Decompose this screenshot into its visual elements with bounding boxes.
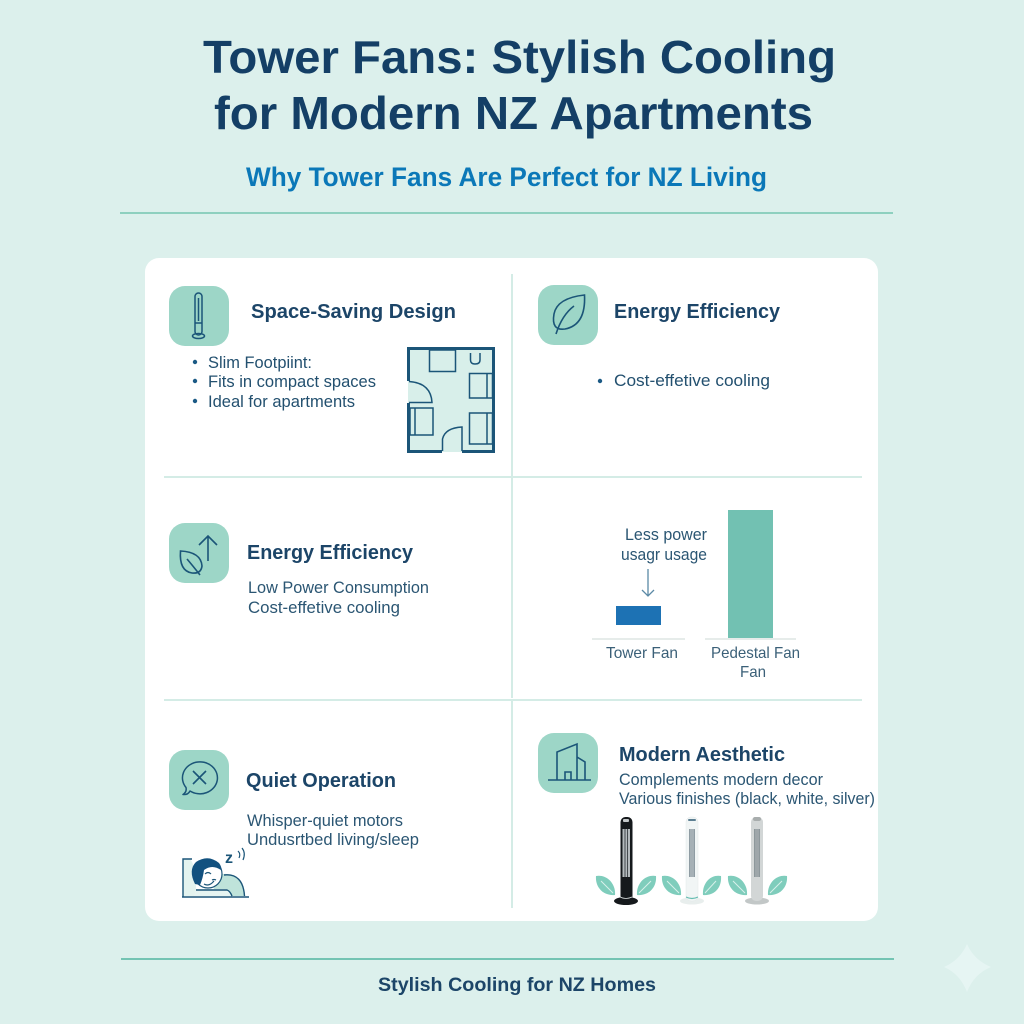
bar: tower fan <box>616 606 661 625</box>
axis labels: Fan <box>740 664 766 681</box>
heading: Energy Efficiency <box>614 301 781 323</box>
icon: leaf and arrow <box>169 523 229 583</box>
bullet list: Fits in compact spaces <box>208 373 376 391</box>
main panel <box>145 258 878 921</box>
panel: energy efficiency lower <box>169 523 429 617</box>
icon: leaf <box>538 285 598 345</box>
title: for Modern NZ Apartments <box>214 87 813 139</box>
heading: Energy Efficiency <box>247 542 414 564</box>
subtitle: Why Tower Fans Are Perfect for NZ Living <box>246 162 767 192</box>
title <box>203 31 836 139</box>
axis labels: Tower Fan <box>606 645 678 662</box>
floor plan <box>407 347 495 453</box>
title: Tower Fans: Stylish Cooling <box>203 31 836 83</box>
icon: speech bubble <box>169 750 229 810</box>
bullet: Cost-effetive cooling <box>614 372 770 390</box>
leaves <box>596 876 787 895</box>
description <box>248 579 429 617</box>
axis labels <box>606 645 800 681</box>
footer text: Stylish Cooling for NZ Homes <box>378 974 656 996</box>
callout <box>621 526 707 596</box>
callout: Less power <box>625 526 707 544</box>
bar: pedestal fan <box>728 510 773 638</box>
description: Various finishes (black, white, silver) <box>619 790 875 808</box>
description <box>247 812 419 849</box>
tower fan: silver <box>745 817 769 904</box>
heading: Space-Saving Design <box>251 301 456 323</box>
description <box>619 771 875 808</box>
icon: tower fan <box>169 286 229 346</box>
panel: modern aesthetic <box>538 733 875 905</box>
panel: space-saving design <box>169 286 495 453</box>
bullet list <box>193 354 376 411</box>
heading: Quiet Operation <box>246 770 396 792</box>
axis labels: Pedestal Fan <box>711 645 800 662</box>
bar chart <box>592 510 800 681</box>
panel: energy efficiency top <box>538 285 781 390</box>
description: Low Power Consumption <box>248 579 429 597</box>
tower fan: black <box>614 817 638 905</box>
icon: sparkle <box>944 944 991 992</box>
description: Cost-effetive cooling <box>248 599 400 617</box>
heading: Modern Aesthetic <box>619 744 785 766</box>
icon: sleeping person: z <box>225 850 233 867</box>
description: Complements modern decor <box>619 771 823 789</box>
bullet list: Ideal for apartments <box>208 393 355 411</box>
tower fan: white <box>680 817 704 904</box>
callout: usagr usage <box>621 546 707 564</box>
description: Whisper-quiet motors <box>247 812 403 830</box>
icon: building <box>538 733 598 793</box>
icon: sleeping person <box>182 848 249 897</box>
bullet list: Slim Footpiint: <box>208 354 312 372</box>
panel: quiet operation <box>169 750 419 897</box>
description: Undusrtbed living/sleep <box>247 831 419 849</box>
